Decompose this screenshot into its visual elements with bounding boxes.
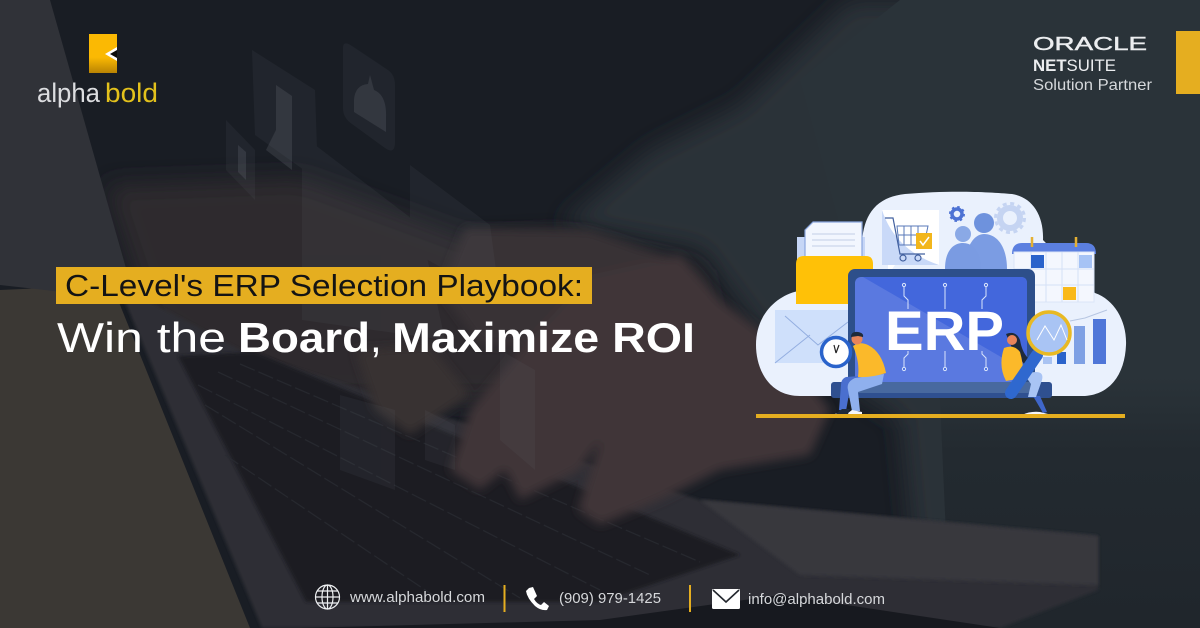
holographic panels [226,43,535,490]
icon: magnifying glass [1011,312,1070,393]
email: info@alphabold.com [748,592,885,608]
main heading [57,314,695,361]
footer contact bar [316,585,885,612]
icon: gears [950,204,1024,232]
bar chart [1043,310,1107,364]
icon: phone [526,587,549,610]
icon: folder and paper [796,222,873,304]
shirt and sleeve [560,0,1200,628]
ground line [756,414,1125,418]
laptop lid [0,0,135,300]
divider [504,585,506,612]
partner badge: Oracle NetSuite: NETSUITE [1033,57,1116,75]
logo: alphabold [37,34,158,108]
icon: people [945,213,1007,269]
partner badge: Oracle NetSuite [1033,34,1153,94]
cloud [756,192,1126,396]
icon: email envelope [712,589,740,609]
laptop base [118,285,1098,628]
figure: woman with magnifier [1001,312,1070,415]
icon: clock [822,338,850,366]
figure: man with clock [822,332,886,415]
icon: calendar [1012,237,1096,302]
laptop [831,269,1052,398]
main heading: Board [238,314,370,361]
keyboard [178,352,740,602]
title block [56,267,695,361]
main heading: Win the [57,314,226,361]
icon: logo mark [89,34,117,73]
right column: shirt into jeans [800,0,1200,628]
gold corner block [1176,31,1200,94]
circuit lines [902,283,988,371]
icon: globe [316,585,340,609]
arm behind text [105,178,720,400]
partner badge: Oracle NetSuite: ORACLE [1033,34,1147,54]
main heading: , [370,314,382,361]
ERP label: ERP [885,299,1004,362]
subtitle highlight [56,267,592,304]
subtitle: C-Level's ERP Selection Playbook: [65,268,583,303]
phone number: (909) 979-1425 [559,591,661,607]
table [0,285,250,628]
hands [355,228,830,525]
icon: shopping cart card [882,210,939,275]
logo wordmark: alpha [37,78,101,108]
icon: envelope [775,310,848,363]
main heading: Maximize ROI [392,314,695,361]
partner badge: Oracle NetSuite: Solution Partner [1033,77,1153,94]
logo wordmark: bold [105,78,158,108]
illustration: ERP cloud [756,192,1126,418]
divider [689,585,691,612]
website: www.alphabold.com [349,590,485,606]
logo wordmark [37,78,158,108]
